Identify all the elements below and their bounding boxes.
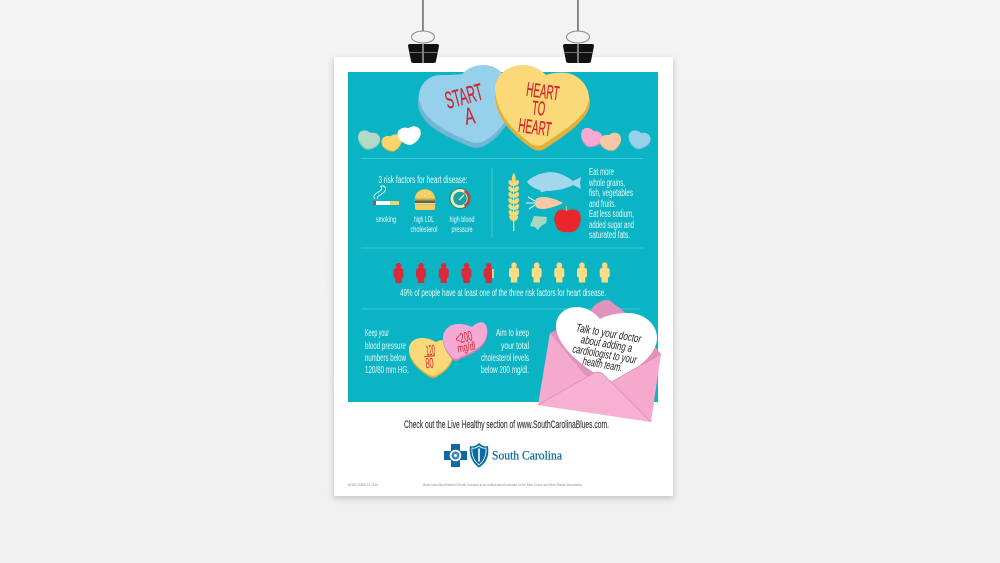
text: cholesterol: cholesterol levels — [481, 353, 529, 364]
icon: burger — [414, 189, 436, 210]
labels: risk factors — [376, 214, 475, 234]
title heart: Heart to Heart — [495, 65, 590, 151]
envelope with heart note: cardiologist to your — [571, 343, 638, 367]
labels: risk factors: smoking — [376, 214, 396, 224]
envelope with heart note: health team. — [582, 356, 623, 374]
text: diet advice: and fruits. — [589, 199, 616, 210]
text: blood pressure — [365, 328, 409, 376]
text: diet advice: Eat more — [589, 167, 614, 178]
title heart: Start a: A — [462, 102, 477, 131]
poster shadow — [333, 59, 674, 499]
icon: carrot — [526, 197, 563, 209]
title heart: Start a: START — [442, 79, 486, 115]
title heart: Start a — [418, 65, 510, 148]
candy heart: under 200: mg/dl — [456, 339, 476, 356]
icon: cigarette — [373, 186, 399, 205]
candy heart: 120/80: 120 — [425, 343, 436, 359]
text: diet advice — [588, 167, 634, 241]
footer call to action: Check out the Live Healthy section of www.SouthCarolinaBlues.com. — [404, 419, 609, 431]
title heart: Heart to Heart: HEART — [525, 79, 561, 105]
fine print: BCBS 20508 12 2016 — [348, 483, 378, 487]
envelope with heart note — [538, 300, 661, 422]
text: blood pressure: blood pressure — [365, 341, 406, 352]
caption: 49%: 49% of people have at least one of the three risk factors for heart disease. — [400, 288, 606, 299]
icon: wheat — [507, 173, 520, 231]
text: cholesterol: below 200 mg/dl. — [481, 365, 529, 376]
envelope with heart note: Talk to your doctor — [575, 322, 643, 346]
poster sheet — [334, 57, 673, 496]
title heart: Heart to Heart: TO — [531, 97, 546, 121]
logo: South Carolina: South Carolina — [492, 448, 562, 462]
candy heart: under 200: <200 — [454, 327, 474, 347]
icon: apple — [554, 206, 581, 232]
title heart: Heart to Heart: HEART — [517, 115, 553, 141]
text: diet advice: fish, vegetables — [589, 188, 633, 199]
icon: pressure gauge — [449, 188, 471, 209]
icon: left binder clip — [408, 0, 439, 63]
small candy hearts right — [578, 126, 652, 154]
text: blood pressure: Keep your — [365, 328, 389, 339]
icon: right binder clip — [563, 0, 594, 63]
pictogram: people — [394, 262, 610, 283]
icon: broccoli — [530, 216, 547, 230]
logo: South Carolina — [444, 443, 562, 468]
text: blood pressure: 120/80 mm HG. — [365, 365, 409, 376]
labels: risk factors: high LDL — [414, 214, 434, 224]
labels: risk factors: high blood — [450, 214, 475, 224]
small candy hearts left — [356, 125, 422, 154]
text: diet advice: saturated fats. — [589, 230, 630, 241]
labels: risk factors: pressure — [452, 224, 473, 234]
candy heart: under 200 — [443, 322, 487, 361]
text: blood pressure: numbers below — [365, 353, 406, 364]
fine print: BlueCross BlueShield of South Carolina is an independent licensee of the Blue Cross and Blue Shield Association. — [423, 483, 583, 487]
text: diet advice: added sugar and — [589, 220, 634, 231]
text: diet advice: whole grains, — [588, 178, 625, 189]
labels: risk factors: cholesterol — [410, 224, 438, 234]
candy heart: 120/80 — [409, 338, 453, 378]
icon: fish — [527, 172, 581, 192]
candy heart: 120/80: 80 — [425, 356, 434, 372]
text: cholesterol: your total — [501, 341, 529, 352]
text: cholesterol — [481, 328, 529, 376]
heading: risk factors: 3 risk factors for heart disease: — [378, 175, 468, 186]
teal panel — [348, 72, 658, 402]
envelope with heart note: about adding a — [580, 334, 633, 355]
fine print — [348, 483, 583, 487]
text: cholesterol: Aim to keep — [496, 328, 529, 339]
text: diet advice: Eat less sodium, — [589, 209, 634, 220]
